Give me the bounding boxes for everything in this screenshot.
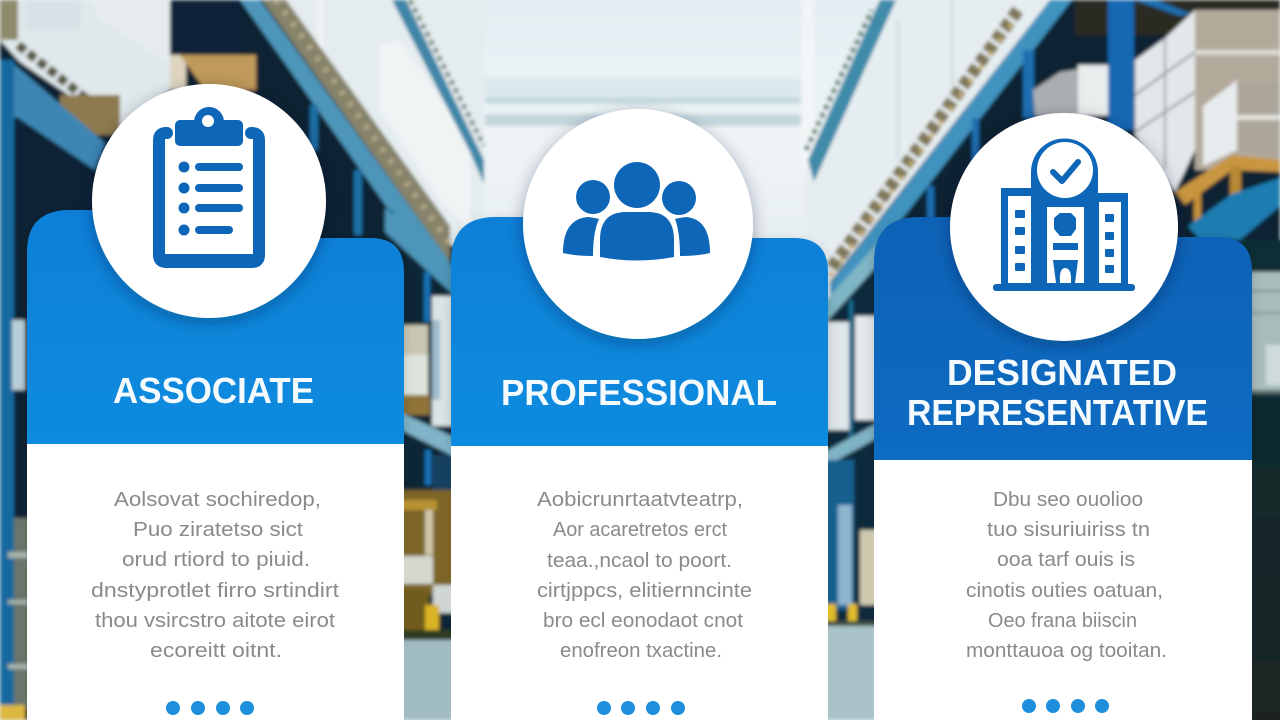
card 2 pagination dots [597, 701, 685, 715]
card 2 description: enofreon txactine. [560, 640, 722, 662]
card 3 description: tuo sisuriuiriss tn [987, 519, 1150, 541]
card 1 description: Puo ziratetso sict [133, 519, 303, 541]
panel: designated representative [874, 113, 1252, 720]
card 2 heading: PROFESSIONAL [501, 372, 777, 413]
card 3 pagination dots [1022, 699, 1109, 713]
card 1 description: dnstyprotlet firro srtindirt [91, 580, 340, 602]
card 1 heading: ASSOCIATE [113, 370, 314, 411]
card 2 description: Aor acaretretos erct [553, 519, 727, 541]
card 2 description [537, 489, 752, 662]
card 2 blue header [451, 217, 828, 446]
card 2 description: teaa.,ncaol to poort. [547, 550, 732, 572]
card 1 white body [27, 444, 404, 720]
card 2 icon circle: people [523, 109, 753, 339]
right gap between card 2 and card 3 [810, 230, 895, 650]
card 1 description: orud rtiord to piuid. [122, 549, 310, 571]
card 2 white body [451, 446, 828, 720]
card 1 description: ecoreitt oitnt. [150, 640, 282, 662]
card 1 description: Aolsovat sochiredop, [114, 489, 321, 511]
card 1 blue header [27, 210, 404, 444]
card 2 description: Aobicrunrtaatvteatrp, [537, 489, 743, 511]
card 3 description: cinotis outies oatuan, [966, 580, 1163, 602]
left gap between card 1 and card 2 [385, 230, 470, 650]
card 2 description: cirtjppcs, elitiernncinte [537, 580, 752, 602]
panel: associate [27, 84, 404, 720]
card 2 description: bro ecl eonodaot cnot [543, 610, 743, 632]
card 3 description [966, 489, 1167, 662]
card 3 heading [907, 352, 1208, 433]
card 1 description [91, 489, 340, 662]
card 3 description: monttauoa og tooitan. [966, 640, 1167, 662]
card 3 description: Oeo frana biiscin [988, 610, 1137, 632]
card 3 description: Dbu seo ouolioo [993, 489, 1143, 511]
panel: professional [451, 109, 828, 720]
card 3 white body [874, 460, 1252, 720]
card 3 blue header [874, 217, 1252, 460]
card 3 heading: DESIGNATED [947, 352, 1177, 393]
card 3 heading: REPRESENTATIVE [907, 392, 1208, 433]
card 3 description: ooa tarf ouis is [997, 549, 1135, 571]
card 1 icon circle: clipboard [92, 84, 326, 318]
card 3 icon circle: building with check [950, 113, 1178, 341]
card 1 description: thou vsircstro aitote eirot [95, 610, 335, 632]
card 1 pagination dots [166, 701, 254, 715]
